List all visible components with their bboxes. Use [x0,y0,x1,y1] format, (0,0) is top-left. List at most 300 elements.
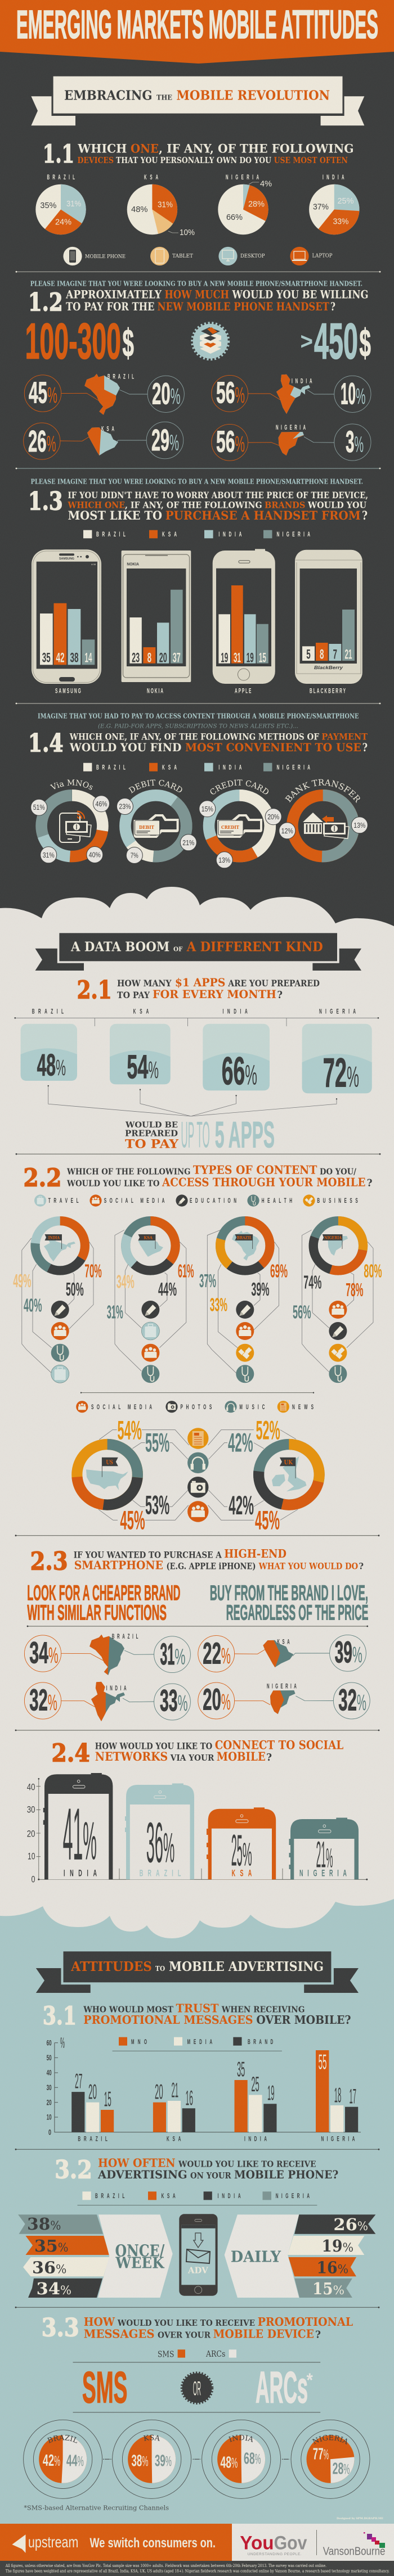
heading 2.2 [24,1163,373,1192]
legend: SMS and ARCs: ARCs [205,2350,225,2359]
pie rings: Brazil SMS vs ARCs: 44 [66,2452,78,2470]
panel: a data boom of a different kind: 70% [84,1261,102,1282]
phone bar: India 41%: INDIA [64,1868,97,1878]
percentages and connectors: US: 54% [117,1415,142,1445]
legend: countries for 1.3: BRAZIL [96,531,126,539]
pie rings: Nigeria SMS vs ARCs: % [343,2461,350,2477]
country labels and timeline for 2.1: KSA [133,1008,149,1016]
legend: content types: TRAVEL [48,1197,79,1205]
map stat: India price: % [235,384,245,408]
phone chart: BlackBerry: 8 [320,647,324,662]
heading 2.4 [52,1738,344,1767]
ribbons: once a week: 38 [27,2214,50,2234]
bar chart: trust by country: 20 [88,2080,97,2103]
map stat: Brazil price: % [47,384,57,408]
legend: countries for 3.2: NIGERIA [276,2192,310,2200]
heading 2.3: (E.G. APPLE iPHONE) [167,1561,256,1572]
map stat: India brand choice: % [48,1691,57,1716]
pie chart: India devices: 25% [338,197,354,206]
percentages and connectors: UK: 42% [229,1490,254,1520]
intro text 1.4: (E.G. PAID-FOR APPS, SUBSCRIPTIONS TO NEWS ALERTS ETC.)... [98,723,298,730]
legend: countries for 1.4: NIGERIA [276,764,310,772]
ribbons: once a week: 35 [34,2236,58,2255]
heading 2.3: SMARTPHONE [74,1559,163,1572]
heading 3.3: PROMOTIONAL [258,2315,353,2329]
map stat: KSA price: 26 [28,425,47,458]
country labels and timeline for 2.1: NIGERIA [319,1008,356,1016]
bar chart: trust by country: 40 [47,2068,52,2077]
heading 2.2: WHICH OF THE FOLLOWING [66,1166,190,1176]
heading 2.1: ARE YOU PREPARED [228,978,320,989]
pie rings: India SMS vs ARCs: 48 [221,2453,231,2471]
heading 2.4: MOBILE [217,1749,266,1763]
donut: Nigeria content [293,1221,382,1383]
country labels and timeline for 2.1: BRAZIL [32,1008,64,1016]
heading 3.3: MOBILE DEVICE [213,2327,314,2340]
donut: debit card: 23% [119,802,131,811]
pie rings: Nigeria SMS vs ARCs [291,2420,370,2498]
heading 3.1: 3.1 [43,2002,77,2031]
icon: phone with advertising envelope: ADV [187,2266,208,2276]
heading 1.1: 1.1 [43,140,74,169]
map stat: Brazil brand choice [24,1633,190,1675]
heading 3.1: PROMOTIONAL MESSAGES [83,2013,253,2027]
heading 1.4: ? [362,741,368,754]
phone bar: India 41%: 41 [63,1793,83,1875]
map stat: KSA price: KSA [101,426,114,432]
donut: US content: US [106,1459,113,1466]
donut: India content: INDIA [48,1235,60,1240]
SMS or ARCs headline: OR [193,2378,201,2399]
callout: would be prepared to pay up to 5 apps: UP TO [181,1114,210,1156]
chart axes: social network access: 10 [28,1851,35,1862]
percentages and connectors: UK: 45% [255,1505,280,1535]
phone bar: Nigeria 21% [289,1817,359,1879]
donut: via MNOs [31,779,109,863]
donut: Brazil content: 33% [210,1294,227,1315]
heading 2.3: 2.3 [30,1548,68,1576]
percentages and connectors: US: 45% [120,1505,145,1535]
phone bar: KSA 25% [207,1807,276,1879]
ribbons: daily: 26 [333,2215,357,2234]
pie chart: Nigeria devices: 4% [260,180,272,189]
options: cheaper brand vs loved brand [27,1582,368,1625]
pie rings: KSA SMS vs ARCs: 39 [155,2452,165,2470]
legend: US and UK content types: SOCIAL MEDIA [91,1404,152,1411]
phone chart: Samsung [32,549,101,695]
panel: embracing the mobile revolution [0,0,394,868]
map stat: KSA price: % [169,431,179,455]
map stat: Brazil price [24,373,184,415]
pie rings: Brazil SMS vs ARCs: % [78,2454,84,2470]
map stat: Brazil brand choice: 34 [29,1636,48,1670]
donut: debit card: DEBIT CARD [128,779,182,793]
pie rings: Nigeria SMS vs ARCs: 28 [333,2460,343,2478]
heading 3.3: WOULD YOU LIKE TO RECEIVE [117,2318,255,2328]
phone chart: BlackBerry [295,550,362,695]
map stat: Nigeria price: % [355,432,364,457]
map stat: KSA price [24,422,183,459]
ribbons: once a week: % [58,2241,68,2254]
bar chart: trust by country: KSA [167,2135,181,2143]
legend: US and UK content types: NEWS [292,1404,314,1411]
phone bar: Brazil 36%: BRAZIL [140,1868,181,1878]
ribbons: once a week: % [50,2219,61,2232]
panel: upstream brand band [0,2524,232,2561]
legend: content types: BUSINESS [317,1197,358,1205]
donut: KSA content: 44% [158,1279,177,1300]
phone bar: Nigeria 21%: NIGERIA [299,1868,347,1878]
map stat: KSA brand choice [198,1635,366,1672]
pie chart: KSA devices [127,174,195,237]
gauge: India 66%: % [245,1059,257,1090]
pie rings: India SMS vs ARCs: 68 [244,2450,255,2468]
device legend: DESKTOP [240,253,265,259]
bar chart: trust by country: 18 [334,2083,341,2106]
designer credit: Designed by SPM.DGRAPH.ME [337,2517,384,2520]
legend: US and UK content types [76,1401,314,1413]
heading 2.1: HOW MANY [117,978,172,989]
heading 2.1: $1 APPS [175,976,225,989]
panel: attitudes to mobile advertising [0,1899,394,2524]
legend: content types: HEALTH [262,1197,292,1205]
ribbons: once a week: % [56,2262,66,2276]
heading 3.2 [55,2155,338,2184]
section ribbon heading: A DIFFERENT KIND [186,940,323,955]
heading 1.2: NEW MOBILE PHONE HANDSET [158,300,330,313]
device legend: LAPTOP [312,252,333,259]
donut: credit card: 13% [218,856,231,864]
pie chart: India devices [309,174,359,234]
legend: countries for 1.4 [83,763,310,772]
ribbons: daily: 19 [321,2236,342,2255]
heading 3.3: 3.3 [42,2313,79,2342]
donut: KSA content: 34% [117,1271,135,1292]
bar chart: trust by country: 35 [237,2058,245,2081]
bar chart: trust by country: BRAZIL [78,2135,108,2143]
heading 2.4: ? [266,1752,272,1763]
map stat: Nigeria price: NIGERIA [276,424,306,431]
gauge: Brazil 48% [21,1024,77,1082]
map stat: India price [212,375,371,414]
map stat: Nigeria brand choice [198,1682,370,1719]
legend: countries for 3.2 [78,2191,317,2205]
legend: SMS and ARCs [73,2349,320,2362]
bar chart: trust by country [47,2034,361,2143]
pie rings: Nigeria SMS vs ARCs: % [324,2447,329,2462]
heading 2.3: IF YOU WANTED TO PURCHASE A [74,1550,222,1560]
donut: KSA content [107,1221,194,1383]
bar chart: trust by country: 19 [267,2081,275,2104]
map stat: Nigeria brand choice: % [221,1690,231,1715]
legend: countries for 3.2: INDIA [218,2192,241,2200]
price range: over 450 dollars: $ [359,321,371,365]
pie chart: Nigeria devices: NIGERIA [226,174,259,181]
map stat: Brazil brand choice: % [174,1645,186,1670]
map stat: KSA brand choice: 22 [203,1636,221,1670]
phone chart: BlackBerry: 21 [344,647,352,662]
heading 2.4: VIA YOUR [170,1753,214,1763]
heading 3.1 [43,2001,351,2031]
callout: would be prepared to pay up to 5 apps: TO PAY [125,1138,179,1152]
heading 3.1: WHEN RECEIVING [221,2004,305,2014]
icon: stack of handsets badge [192,323,229,359]
phone chart: BlackBerry: 5 [306,647,311,662]
panel: a data boom of a different kind [0,887,394,1946]
chart axes: social network access: 40 [27,1781,35,1792]
heading 1.2: WOULD YOU BE WILLING [232,288,368,301]
phone bar: Brazil 36%: % [163,1824,174,1871]
heading 1.2: 1.2 [28,288,63,317]
pie rings: KSA SMS vs ARCs: KSA [143,2435,160,2441]
gauge: Nigeria 72% [302,1024,372,1096]
chart axes: social network access: 30 [27,1804,35,1815]
chart axes: social network access: 0 [32,1874,35,1885]
heading 2.4: CONNECT TO SOCIAL [215,1738,344,1752]
gauge: India 66% [203,1024,270,1093]
heading 1.2: APPROXIMATELY [65,288,162,301]
donut: Brazil content: 37% [199,1270,216,1291]
center icons: news, music, photos, social [187,1428,208,1522]
map stat: Nigeria price: % [235,432,245,457]
donut: Nigeria content: 56% [293,1301,311,1322]
donut: credit card: 20% [267,813,280,821]
heading 1.3: ? [362,509,368,523]
donut: via MNOs: 46% [96,800,108,808]
percentages and connectors: US: 53% [145,1490,169,1520]
heading 2.1: 2.1 [77,976,112,1005]
section ribbon heading [35,933,361,971]
heading 3.2: ON YOUR [190,2171,231,2181]
bar chart: trust by country: NIGERIA [321,2135,355,2143]
phone chart: Nokia: 23 [132,650,140,665]
pie chart: Brazil devices: 31% [66,200,81,209]
price range: 100-300 dollars [25,313,134,369]
bar chart: trust by country: 20 [155,2080,163,2103]
footnote: *SMS-based Alternative Recruiting Channels [24,2503,169,2511]
heading 2.3: HIGH-END [224,1547,286,1560]
heading 1.3: MOST LIKE TO [68,509,162,523]
map stat: KSA brand choice: % [352,1643,362,1668]
phone chart: Apple: 19 [221,650,228,665]
donut: KSA content: KSA [144,1235,153,1240]
heading 2.1: ? [277,989,283,1001]
map stat: Nigeria brand choice: 32 [338,1684,357,1717]
pie chart: Nigeria devices: 66% [226,213,243,222]
legend: countries for 1.4: BRAZIL [96,764,126,772]
ribbons: daily: % [342,2241,353,2254]
donut: KSA content: 31% [107,1301,123,1322]
heading 3.2: 3.2 [55,2155,92,2184]
heading 3.2: MOBILE PHONE? [234,2168,338,2181]
map stat: Nigeria price: 56 [216,425,235,459]
map stat: India brand choice: 33 [160,1684,178,1718]
pie rings: Brazil SMS vs ARCs: BRAZIL [47,2435,77,2443]
heading 2.2: ? [367,1177,373,1189]
donut: debit card: DEBIT [139,825,155,831]
price range: 100-300 dollars: $ [122,321,134,365]
title banner [0,0,394,64]
map stat: India price: 10 [341,377,356,410]
chart axes: social network access: 20 [27,1829,35,1839]
panel: footer disclaimer: All figures, unless otherwise stated, are from YouGov Plc. Total sample size was 1000+ adults. Fieldwork was undertaken between 6th-20th February 2013. The survey was carried out online. [5,2563,326,2568]
heading 1.4: MOST CONVENIENT TO USE [185,741,361,754]
map stat: India brand choice: INDIA [106,1685,127,1691]
phone chart: Samsung: SAMSUNG [59,557,74,561]
heading 1.1: ONE [131,142,159,156]
donut: Nigeria content: 74% [303,1272,321,1293]
phone chart: Apple: 19 [247,650,254,665]
heading 2.2: ACCESS THROUGH YOUR MOBILE [162,1175,366,1189]
device legend: TABLET [172,253,194,259]
pie rings: India SMS vs ARCs: % [255,2452,261,2467]
pie rings: Brazil SMS vs ARCs: 42 [43,2452,54,2470]
heading 3.1: OVER MOBILE? [256,2013,351,2027]
donut: debit card [117,779,196,863]
price range: 100-300 dollars: 100-300 [25,313,121,369]
connector dots [103,2458,289,2460]
donut: credit card: CREDIT CARD [211,779,268,794]
legend: content types [34,1194,358,1207]
donut: credit card: CREDIT [221,825,240,831]
donut: Nigeria content: 78% [346,1279,364,1300]
phone bar: Brazil 36%: 36 [146,1812,163,1875]
phone chart: Samsung: 4:08 [91,563,96,566]
heading 1.1 [43,140,353,169]
map stat: India price: INDIA [292,378,312,385]
map stat: Nigeria brand choice: 20 [203,1683,221,1717]
pie chart: KSA devices: 31% [158,201,173,210]
legend: countries for 1.3: NIGERIA [276,531,310,539]
bar chart: trust by country: 55 [319,2050,326,2073]
heading 1.4: PAYMENT [321,732,368,742]
ribbons: once a week: WEEK [115,2254,165,2272]
heading 2.3 [30,1547,364,1576]
legend: MNO, media, brand: BRAND [248,2038,273,2046]
ribbons: once a week [18,2214,173,2298]
map stat: KSA brand choice: KSA [277,1638,290,1645]
bar chart: trust by country: INDIA [244,2135,267,2143]
pie chart: Brazil devices: 24% [55,218,71,227]
heading 3.2: ADVERTISING [97,2168,187,2181]
bar chart: trust by country: 10 [47,2113,52,2122]
bar chart: trust by country: 25 [251,2073,259,2096]
phone chart: Apple: 31 [234,650,241,665]
legend: countries for 1.3: KSA [162,531,177,539]
heading 2.1: FOR EVERY MONTH [153,987,276,1001]
phone chart: Apple [213,549,275,695]
section ribbon heading: MOBILE ADVERTISING [169,1959,324,1974]
panel: upstream brand band: upstream [28,2533,78,2551]
map stat: India price: % [356,384,366,409]
pie chart: Brazil devices: BRAZIL [47,174,75,181]
gauge: India 66%: 66 [222,1049,245,1093]
percentages and connectors: UK: 52% [256,1415,280,1445]
legend: MNO, media, brand: MNO [131,2038,147,2046]
pie chart: India devices: 33% [333,218,349,227]
pie rings: KSA SMS vs ARCs: % [142,2454,148,2470]
heading 1.1: THAT YOU PERSONALLY OWN DO YOU [116,156,271,165]
pie chart: Nigeria devices: 28% [248,200,265,209]
heading 1.4: WHICH ONE, IF ANY, OF THE FOLLOWING METHODS OF [69,732,320,742]
heading 2.2: WOULD YOU LIKE TO [66,1178,160,1188]
bar chart: trust by country: 0 [48,2127,51,2136]
pie chart: Brazil devices: 35% [40,201,56,210]
map stat: KSA brand choice: 39 [335,1636,352,1670]
donut: debit card: 21% [182,838,195,847]
legend: SMS and ARCs: SMS [158,2351,174,2360]
section ribbon heading: MOBILE REVOLUTION [176,88,330,103]
panel: attitudes to mobile advertising: ARCs [256,2362,308,2412]
heading 3.3: HOW [84,2315,115,2329]
map stat: India price: 56 [216,376,235,410]
section ribbon heading: EMBRACING [64,88,152,103]
pie rings: KSA SMS vs ARCs [112,2419,191,2499]
ribbons: once a week: 36 [32,2258,56,2277]
device legend [63,247,333,265]
ribbons: daily [225,2214,375,2298]
panel: footer disclaimer [0,2561,394,2576]
heading 1.3: WHICH ONE [68,499,125,510]
bar chart: trust by country: 21 [171,2079,178,2102]
donut: Brazil content [199,1221,288,1383]
map stat: KSA price: % [47,432,56,457]
panel: YouGov and VansonBourne logos: You [240,2532,274,2554]
SMS or ARCs headline: SMS [82,2362,127,2412]
phone chart: Samsung: 38 [70,650,79,665]
phone bar: India 41% [43,1773,113,1879]
map stat: Nigeria price: 3 [346,425,355,459]
phone bar: Nigeria 21%: % [326,1844,333,1874]
ribbons: daily: % [333,2284,344,2297]
donut: debit card: 7% [131,851,138,859]
heading 1.1: , IF ANY, OF THE FOLLOWING [159,142,353,156]
map stat: Nigeria brand choice: NIGERIA [267,1682,297,1690]
panel: attitudes to mobile advertising: 17 [349,2085,356,2108]
percentages and connectors: US: 55% [145,1428,169,1458]
heading 2.4: NETWORKS [95,1749,168,1763]
gauge: Nigeria 72%: % [347,1061,359,1094]
pie chart: KSA devices: 48% [131,205,148,214]
phone chart: Samsung: 35 [42,650,51,665]
section ribbon heading [36,1951,359,1993]
pie chart: Nigeria devices [218,174,272,234]
phone chart: Samsung: 42 [56,650,64,665]
panel: a data boom of a different kind: 69% [270,1261,288,1282]
percentages and connectors: US [98,1415,189,1535]
section ribbon heading: ATTITUDES [70,1959,152,1974]
gauge: KSA 54%: % [148,1057,159,1084]
donut: bank transfer [279,779,368,863]
map stat: India brand choice: 32 [29,1684,48,1717]
connector lines to callout [47,1085,337,1116]
section ribbon heading: THE [156,93,172,101]
heading 1.2 [28,288,368,317]
legend: countries for 1.3 [83,530,310,539]
pie rings: Nigeria SMS vs ARCs: 77 [313,2445,324,2463]
heading 1.3: BRANDS [265,499,305,510]
phone chart: Nokia: 8 [147,650,151,665]
legend: countries for 1.4: KSA [162,764,177,772]
section ribbon heading: A DATA BOOM [70,940,169,955]
heading 2.2: 2.2 [24,1163,61,1192]
country labels and timeline for 2.1 [15,1008,379,1026]
panel: YouGov and VansonBourne logos: Gov [274,2532,307,2554]
heading 3.1: TRUST [176,2001,219,2015]
options: cheaper brand vs loved brand: WITH SIMILAR FUNCTIONS [27,1601,167,1625]
phone chart: Samsung: SAMSUNG [55,688,81,695]
bar chart: trust by country: % [60,2034,65,2051]
